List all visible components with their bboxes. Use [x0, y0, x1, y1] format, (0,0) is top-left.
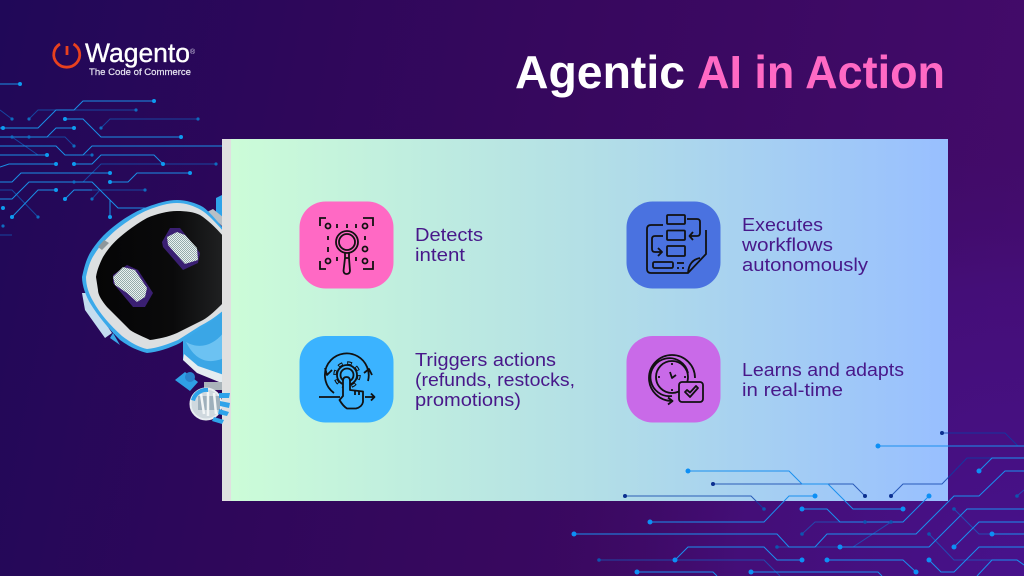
circuit lines: left: [0, 82, 223, 235]
card edge strip: [222, 139, 231, 501]
item: triggers actions: [300, 336, 575, 422]
icon: magnifier scan: [320, 218, 373, 274]
icon: clock with check: [649, 355, 703, 404]
label: Triggers actions: [415, 350, 556, 370]
label: Learns and adapts: [742, 360, 904, 380]
logo registered mark: ®: [190, 48, 196, 56]
icon tile: blue: [626, 202, 720, 288]
title accent: AI in Action: [697, 46, 945, 98]
item: executes workflows: [626, 202, 868, 288]
title: Agentic: [515, 46, 685, 98]
robot: [82, 195, 224, 391]
robot eye: right: [162, 228, 200, 270]
label: Detects: [415, 225, 483, 245]
item: learns and adapts: [626, 336, 904, 422]
icon tile: violet: [626, 336, 720, 422]
card panel: [231, 139, 948, 501]
label: Executes: [742, 215, 823, 235]
logo wordmark: Wagento: [85, 38, 190, 68]
robot eye: left: [113, 265, 153, 307]
robot body: [82, 195, 224, 391]
logo: [54, 38, 196, 78]
label: workflows: [741, 235, 833, 255]
logo tagline: The Code of Commerce: [89, 67, 191, 78]
label: promotions): [415, 390, 521, 410]
icon: gear with hand: [319, 353, 374, 408]
item: detects intent: [300, 202, 483, 288]
logo icon: power ring: [54, 44, 80, 67]
robot head: [82, 200, 224, 353]
card: [222, 139, 948, 501]
label: intent: [415, 245, 465, 265]
robot hand: [190, 388, 230, 424]
label: (refunds, restocks,: [415, 370, 575, 390]
icon tile: sky blue: [300, 336, 394, 422]
icon: workflow document: [647, 215, 706, 273]
label: autonomously: [742, 255, 868, 275]
label: in real-time: [742, 380, 843, 400]
icon tile: pink: [300, 202, 394, 288]
circuit lines: right: [572, 431, 1024, 576]
